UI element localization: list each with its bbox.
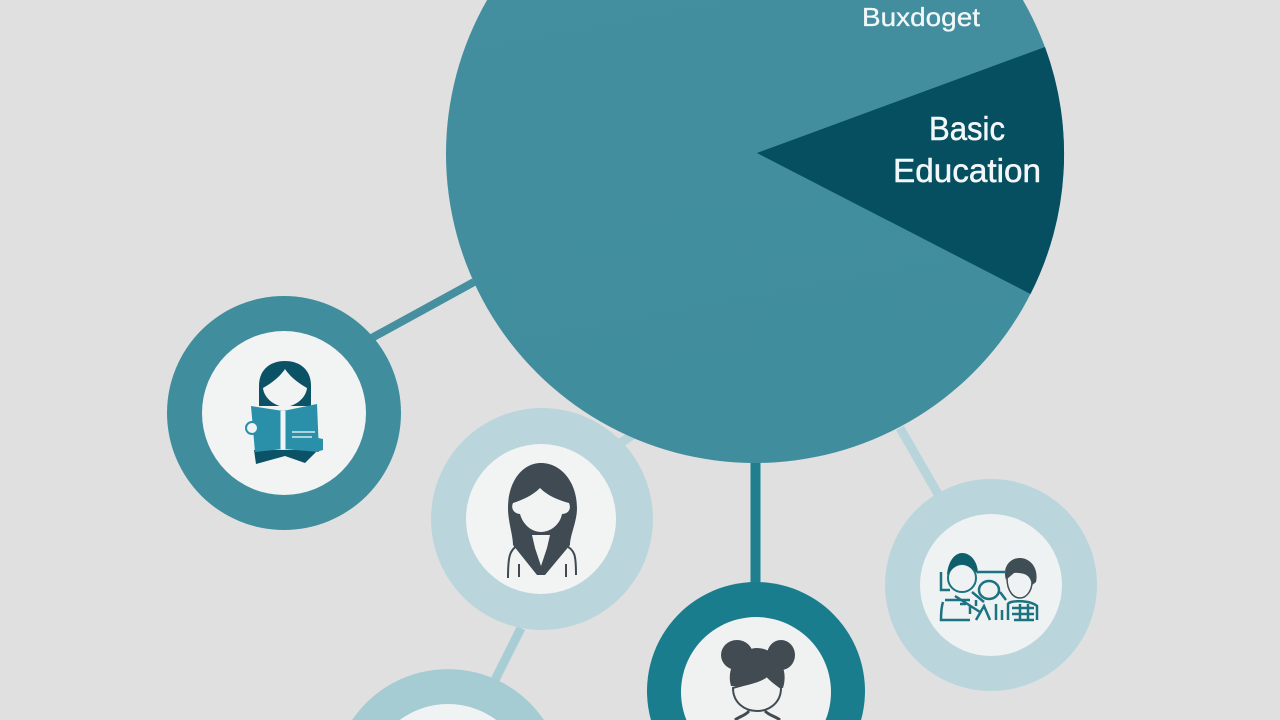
icon: family of parents and child bbox=[941, 553, 1037, 620]
connector: pie to reading student bbox=[368, 282, 474, 340]
connector: long hair girl to bottom circle bbox=[494, 628, 521, 682]
node: girl with long hair bbox=[431, 408, 653, 630]
node: pigtail child bbox=[647, 582, 865, 720]
icon: girl with long hair bbox=[508, 463, 577, 578]
pie slice: basic education bbox=[757, 47, 1064, 294]
icon: child with pigtails bbox=[721, 640, 795, 720]
label: budget: Buxdoget bbox=[862, 2, 981, 32]
node: family group bbox=[885, 479, 1097, 691]
node: partially visible bottom circle bbox=[352, 669, 544, 720]
label: basic: Basic bbox=[929, 110, 1005, 147]
connector: pie to pigtail child bbox=[750, 455, 760, 590]
icon: student reading a book bbox=[246, 361, 323, 464]
connector: pie to family group bbox=[900, 428, 938, 494]
label: education: Education bbox=[893, 152, 1041, 189]
budget pie chart bbox=[446, 0, 1064, 463]
node: reading student bbox=[167, 296, 401, 530]
connector: pie to girl with long hair bbox=[610, 430, 640, 450]
